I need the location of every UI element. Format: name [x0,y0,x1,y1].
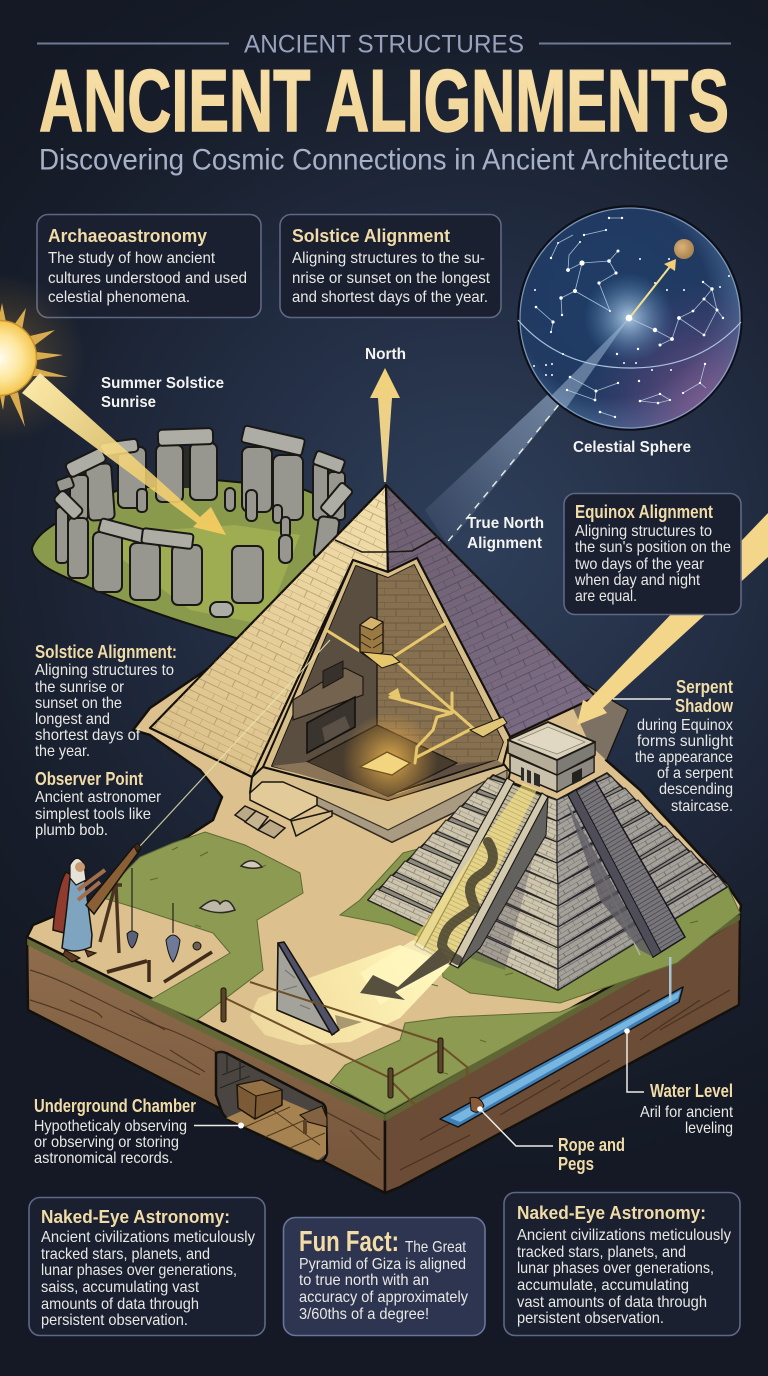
gold king chamber [360,752,410,775]
sun pool and shadow arrow [250,940,450,1045]
leader [624,1028,644,1092]
panel: solstice alignment: and shortest days of the year. [292,289,488,306]
label: summer solstice sunrise [101,375,224,411]
label: water level: Water Level [650,1080,733,1101]
label: solstice alignment side note: shortest days of [35,727,141,744]
sphere arrow [631,259,676,316]
label: water level: Aril for ancient [640,1104,734,1121]
crate [237,1080,282,1119]
feet [63,950,96,962]
observer figure [53,843,212,982]
label: observer point: plumb bob. [35,822,108,839]
chamber leader [194,1122,244,1128]
capstone edge [335,537,437,552]
panel: naked-eye astronomy right: Naked-Eye Astronomy: [517,1202,706,1223]
panel: solstice alignment: Aligning structures to the su- [292,250,485,267]
panel: archaeoastronomy: Archaeoastronomy [48,225,208,246]
underground chamber cutaway [194,1052,327,1161]
interior cutaway [263,558,510,808]
rope and pegs [221,982,553,1146]
water level channel [440,957,683,1127]
label: serpent shadow: of a serpent [657,765,733,782]
panel: fun fact: Pyramid of Giza is aligned [299,1256,466,1273]
label: observer point [35,768,162,839]
stonehenge [32,425,353,642]
left rooms [293,661,363,753]
label: underground chamber [34,1095,196,1167]
cloak [53,872,80,934]
moon [674,239,694,259]
great pyramid [150,485,596,842]
right face tiers [557,776,727,990]
soil [27,913,740,1193]
label: serpent shadow: during Equinox [637,717,733,734]
panel: solstice alignment: Solstice Alignment [292,225,450,246]
gold chamber box [360,617,400,668]
panel: naked-eye astronomy left: saiss, accumulating vast [41,1279,200,1296]
panel: naked-eye astronomy right: persistent observation. [517,1310,664,1327]
serpent shadow [442,842,493,960]
label: solstice alignment side note: sunset on the [35,695,122,712]
sunlight arrow [22,373,226,535]
label: solstice alignment side note: the year. [35,743,90,760]
panel: equinox alignment: two days of the year [575,556,705,573]
label: serpent shadow: Serpent [676,676,733,697]
arms and telescope [78,843,141,914]
north arrow [365,346,406,482]
gold passages [326,623,507,763]
right face [386,485,596,737]
robe [62,874,92,951]
plinth and steps [235,763,510,842]
panel: naked-eye astronomy left: lunar phases over generations, [41,1262,237,1279]
interior left wall [272,566,377,766]
left stones [53,447,115,578]
label: solstice alignment side note [35,641,177,760]
label: observer point: Observer Point [35,768,143,789]
label: serpent shadow [613,676,734,815]
panel: archaeoastronomy: celestial phenomena. [48,289,190,306]
panel: naked-eye astronomy right: vast amounts of data through [517,1294,707,1311]
label: solstice alignment side note: Aligning structures to [35,662,174,679]
island terrain [27,610,741,1193]
head [70,858,86,885]
pyramid silhouette [368,773,727,990]
constellations [533,217,730,418]
mayan pyramid [368,722,727,990]
label: true north alignment [467,515,544,552]
gold glow [342,712,438,808]
left staircase [415,778,548,968]
label: celestial sphere: Celestial Sphere [573,439,691,456]
label: true north alignment: True North [467,515,544,532]
label: solstice alignment side note: the sunrise or [35,679,125,696]
tripod [100,882,122,953]
panel: naked-eye astronomy left: Ancient civilizations meticulously [41,1229,255,1246]
label: observer point: simplest tools like [35,806,151,823]
stair sunlight [413,783,537,963]
panel: fun fact: The Great [405,1239,466,1256]
panel: equinox alignment: when day and night [574,572,700,589]
label: underground chamber: Underground Chamber [34,1095,196,1116]
plumb bobs [127,868,201,962]
core star [626,315,632,321]
observer sight line [140,640,330,846]
label: serpent shadow: descending [659,781,733,798]
panel: fun fact: accuracy of approximately [299,1289,468,1306]
left face shadow [470,822,540,970]
panel: equinox alignment: Aligning structures to [575,523,712,540]
panel: solstice alignment: nrise or sunset on the longest [292,270,491,287]
panel: archaeoastronomy: The study of how ancient [48,250,216,267]
kicker: ancient structures: ANCIENT STRUCTURES [244,30,524,58]
label: serpent shadow: the appearance [635,749,733,766]
label: summer solstice sunrise: Sunrise [101,394,156,411]
label: underground chamber: or observing or storing [34,1134,179,1151]
left face tiers [368,778,558,990]
celestial beam [425,318,629,545]
panel: naked-eye astronomy left: amounts of data through [41,1296,199,1313]
panel: naked-eye astronomy left [29,1198,265,1336]
panel: equinox alignment: the sun's position on the [575,539,731,556]
label: rope and pegs: Rope and [558,1134,625,1155]
right staircase [566,780,685,957]
label: underground chamber: astronomical records. [34,1150,173,1167]
subtitle: Discovering Cosmic Connections in Ancient Architecture [39,144,729,176]
label: serpent shadow: Shadow [675,695,733,716]
tools on ground [107,952,212,982]
panel: equinox alignment: are equal. [575,588,637,605]
panel: naked-eye astronomy left: persistent observation. [41,1312,188,1329]
label: serpent shadow: staircase. [671,798,733,815]
panel: equinox alignment: Equinox Alignment [575,501,713,522]
panel: naked-eye astronomy left: Naked-Eye Astronomy: [41,1206,230,1227]
equinox sunbeam [577,513,768,725]
shaded sand behind pyramid [560,680,627,760]
panel: naked-eye astronomy right: Ancient civilizations meticulously [517,1227,731,1244]
panel: equinox alignment [564,494,741,614]
panel: naked-eye astronomy right: lunar phases over generations, [517,1260,714,1277]
label: underground chamber: Hypotheticaly observing [34,1118,187,1135]
label: solstice alignment side note: Solstice Alignment: [35,641,177,662]
label: rope and pegs: Pegs [558,1153,594,1174]
gnomon [277,942,362,1035]
panel: fun fact [284,1218,485,1336]
label: water level [640,1080,734,1137]
panel: naked-eye astronomy right: tracked stars, planets, and [517,1244,686,1261]
floor [307,725,457,797]
grass patches [100,800,740,1113]
label: rope and pegs [558,1134,625,1174]
header [37,30,731,176]
label: water level: leveling [685,1120,733,1137]
sun [0,273,85,443]
panel: naked-eye astronomy right [504,1192,740,1336]
peg [470,1097,484,1112]
label: solstice alignment side note: longest and [35,711,110,728]
label: north: North [365,346,406,363]
panel: fun fact: 3/60ths of a degree! [299,1306,429,1323]
panel: naked-eye astronomy left: tracked stars, planets, and [41,1246,210,1263]
panel: archaeoastronomy [37,214,261,318]
panel: solstice alignment [280,214,501,318]
left face [150,485,388,777]
rocks [200,861,262,913]
front trilithon [93,518,263,605]
interior right wall [377,565,503,765]
panel: naked-eye astronomy right: accumulate, accumulating [517,1277,689,1294]
label: true north alignment: Alignment [467,535,543,552]
panel: fun fact: to true north with an [299,1272,429,1289]
rope leader [477,1106,553,1146]
temple [508,722,595,792]
equator [518,320,741,368]
celestial sphere [510,206,742,437]
sand [27,610,741,1113]
back stones [99,425,353,560]
label: summer solstice sunrise: Summer Solstice [101,375,224,392]
label: serpent shadow: forms sunlight [637,733,734,750]
small stones [137,488,292,617]
panel: fun fact: Fun Fact: [299,1226,399,1258]
panel: archaeoastronomy: cultures understood and used [48,270,247,287]
shadow arrow [360,948,450,1000]
grass [32,480,330,642]
label: observer point: Ancient astronomer [35,789,162,806]
table [300,1106,327,1134]
